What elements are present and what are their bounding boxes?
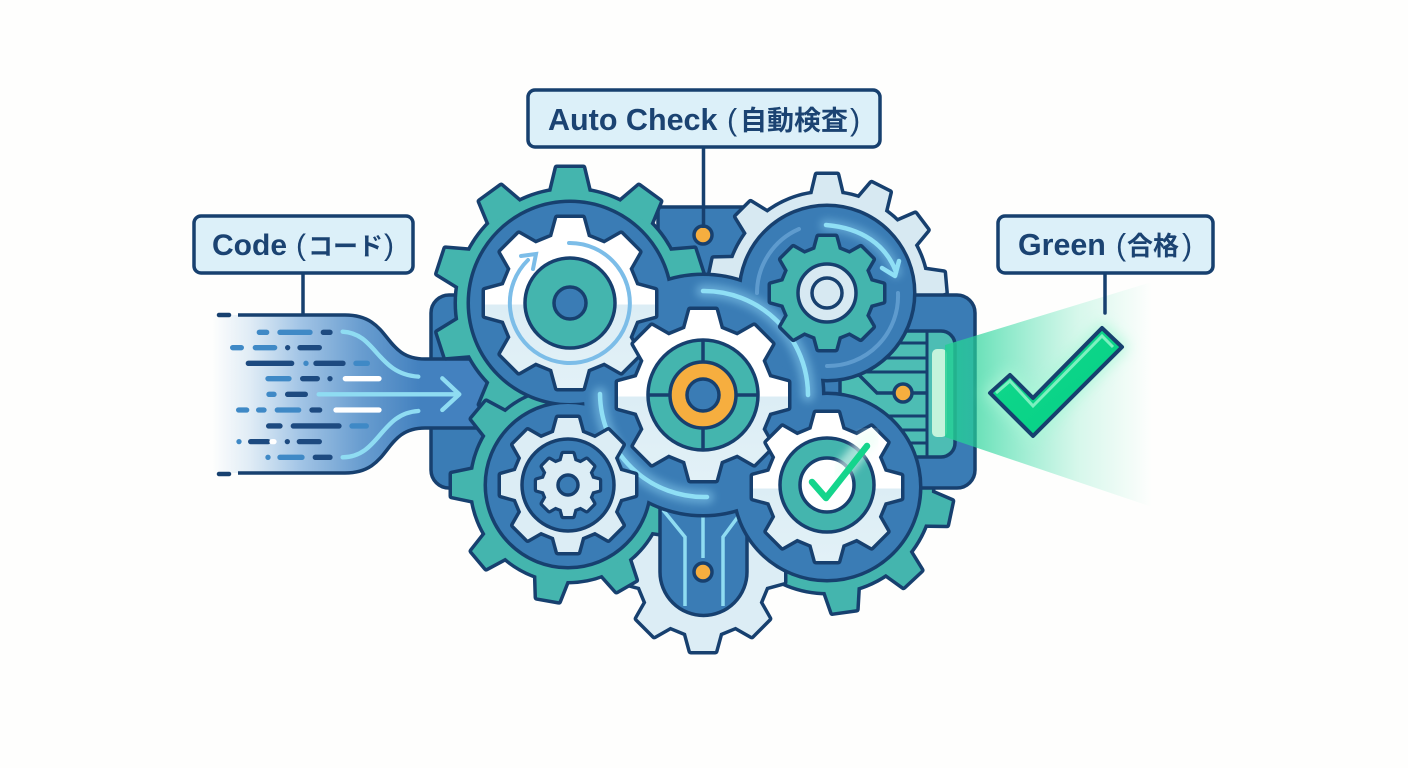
icon: orange ring — [670, 362, 736, 428]
label: Code: Code — [212, 229, 287, 262]
icon: orange node on shield — [694, 563, 712, 581]
icon: large green check — [990, 328, 1122, 436]
label: Green: Green — [1018, 228, 1106, 262]
connector: auto check line — [702, 147, 705, 228]
label: Auto Check — [528, 90, 880, 147]
icon: small green check — [812, 438, 870, 498]
label: Green: ( — [1116, 228, 1126, 262]
label: Code: ) — [384, 229, 394, 262]
panel: main housing plate — [431, 295, 975, 488]
icon: orange node on fins — [894, 384, 912, 402]
gear: bottom right white gear with check — [753, 413, 901, 561]
beam: green light output — [945, 282, 1152, 507]
panel: blue central hub merged discs — [470, 203, 919, 579]
label: Auto Check: Auto Check — [548, 103, 718, 137]
gear: center white gear — [618, 310, 788, 480]
gear: top left white gear — [485, 218, 655, 388]
funnel: incoming code stream — [212, 315, 495, 474]
gear: top left outer teal gear — [436, 168, 704, 438]
label: Green: ) — [1182, 228, 1192, 262]
panel: output window with fins — [840, 331, 955, 457]
connector: code line — [301, 273, 305, 315]
gear: bottom left white gear — [501, 418, 635, 552]
connector: green line — [1103, 273, 1107, 313]
label: Auto Check: ( — [727, 103, 737, 137]
icon: orange node top plate — [694, 226, 712, 244]
panel: bottom circuit shield — [660, 490, 747, 615]
label: Auto Check: ) — [850, 103, 860, 137]
code dashes — [233, 332, 459, 457]
gear: top right inner teal gear — [757, 225, 899, 366]
gear: bottom center light gear — [622, 489, 784, 651]
arcs: central rotation glow — [600, 291, 808, 497]
arrow: rotation ring — [510, 243, 630, 363]
label: Code — [194, 216, 413, 273]
panel: top circuit plate — [658, 207, 758, 297]
label: Green: 合格 — [1127, 231, 1179, 261]
gear: bottom left outer teal gear — [452, 368, 682, 602]
gear: top right outer light gear — [708, 175, 946, 393]
label: Auto Check: 自動検査 — [740, 106, 848, 136]
gear hub: teal disc — [525, 258, 615, 348]
label: Code: ( — [296, 229, 306, 262]
gear: small inner gear — [537, 454, 599, 516]
gear: bottom right outer teal gear — [722, 382, 953, 613]
label: Green — [998, 216, 1213, 273]
arrow: rotation — [826, 225, 899, 276]
label: Code: コード — [308, 233, 383, 261]
